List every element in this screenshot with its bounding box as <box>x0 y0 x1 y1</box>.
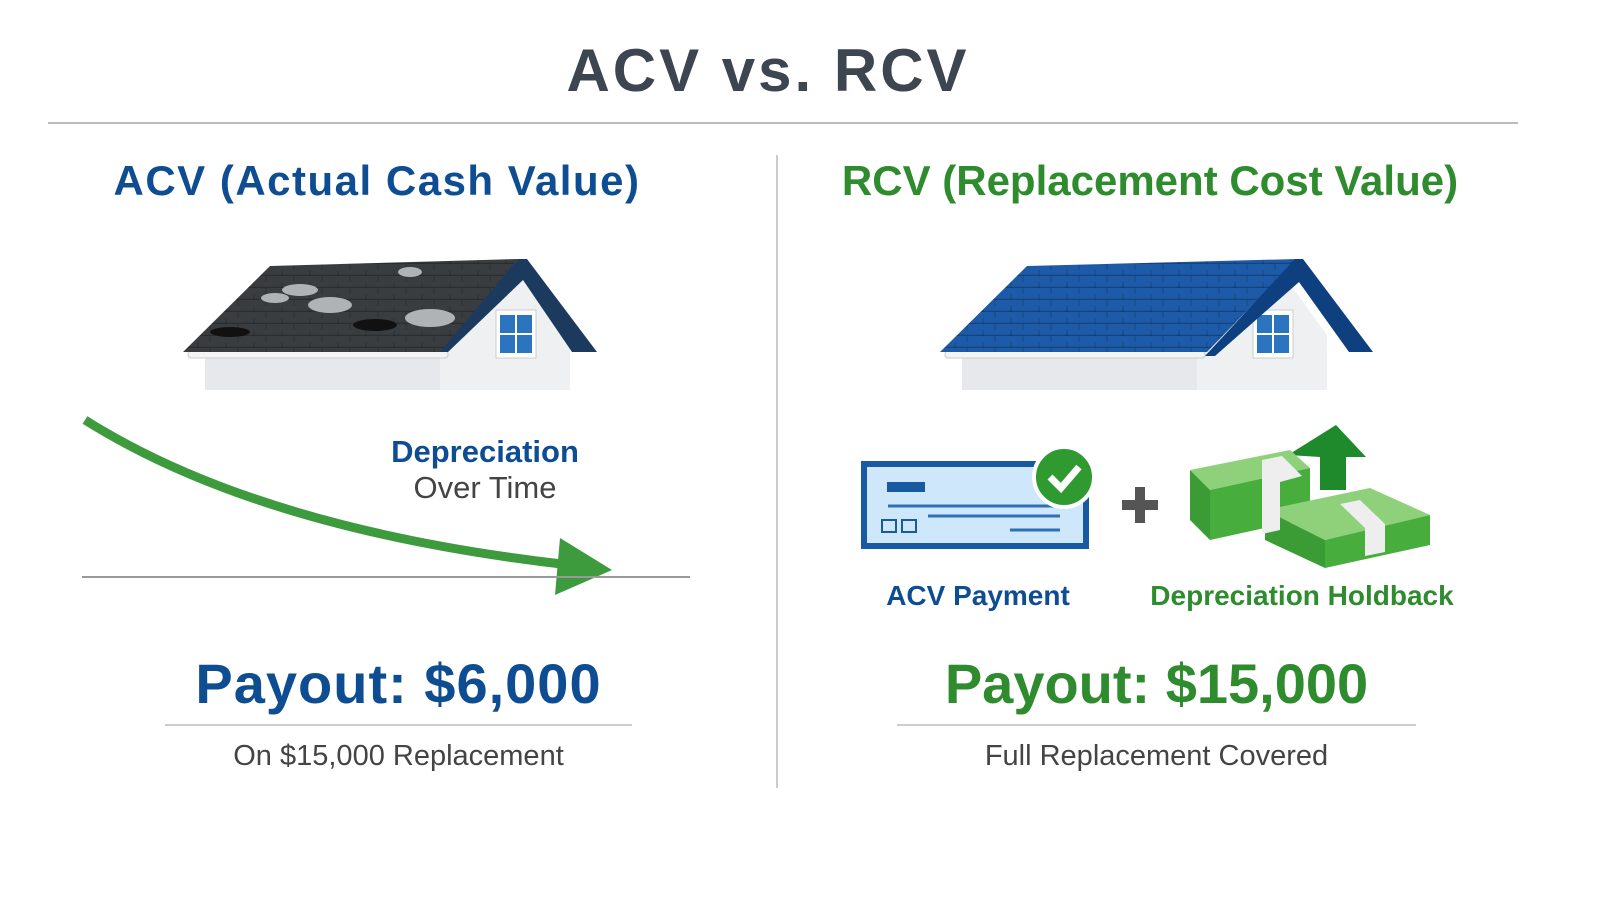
icon: new blue house <box>940 259 1373 390</box>
icon: plus <box>1122 487 1158 523</box>
payout: RCV: Full Replacement Covered <box>985 740 1328 772</box>
payout: ACV <box>165 652 632 772</box>
label: ACV payment: ACV Payment <box>886 580 1070 611</box>
label: depreciation over time <box>391 434 579 505</box>
heading: RCV: RCV (Replacement Cost Value) <box>842 157 1458 204</box>
label: depreciation holdback: Depreciation Holdback <box>1150 580 1454 611</box>
payout: RCV: Payout: $15,000 <box>945 652 1368 715</box>
label: depreciation over time: Over Time <box>414 470 556 505</box>
icon: money stacks <box>1190 425 1430 568</box>
payout: ACV: On $15,000 Replacement <box>233 740 564 772</box>
icon: check <box>864 447 1094 546</box>
title: ACV vs. RCV <box>566 37 970 104</box>
payout: RCV <box>897 652 1416 772</box>
label: depreciation over time: Depreciation <box>391 434 579 469</box>
icon: damaged house <box>183 259 597 390</box>
arrow: depreciation curve <box>85 420 612 595</box>
payout: ACV: Payout: $6,000 <box>195 652 602 715</box>
heading: ACV: ACV (Actual Cash Value) <box>114 157 640 204</box>
